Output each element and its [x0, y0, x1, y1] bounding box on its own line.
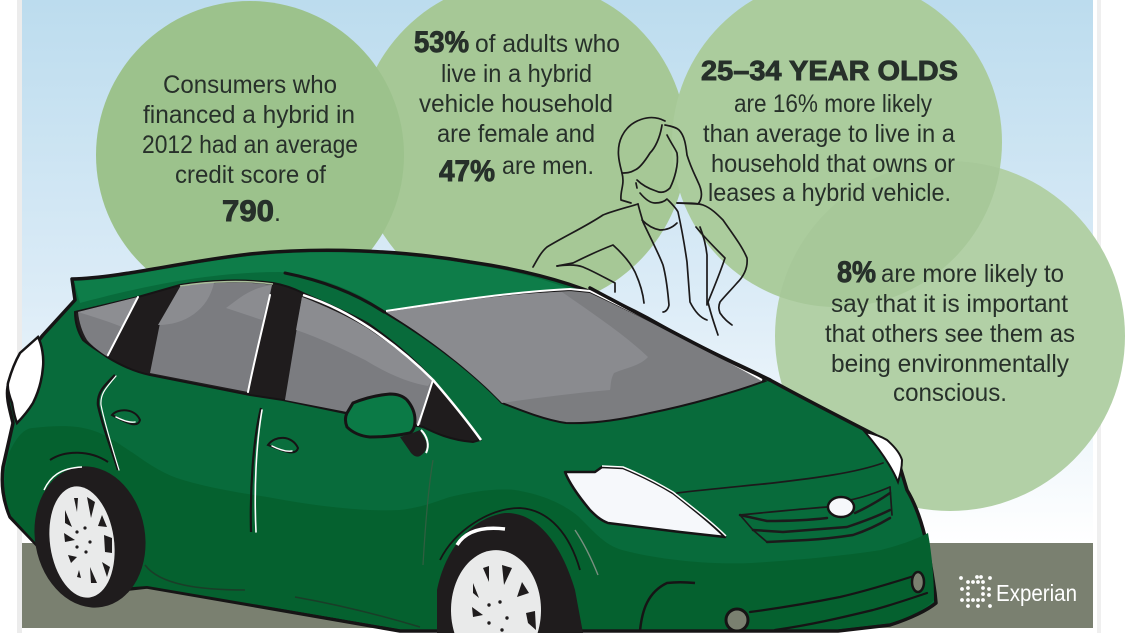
- car roof highlight: [74, 252, 575, 311]
- text: age group stat: household that owns or: [711, 150, 955, 178]
- illustration: woman line drawing: [533, 118, 747, 335]
- front wheel: [437, 508, 583, 633]
- text: gender split stat: [414, 26, 620, 188]
- circle: environmentally conscious: [775, 161, 1125, 511]
- circle: 53% female: [357, 0, 687, 310]
- text: gender split stat: vehicle household: [419, 90, 613, 118]
- window trim: [303, 295, 481, 440]
- main headlight: [565, 467, 725, 537]
- text: age group stat: leases a hybrid vehicle.: [708, 179, 951, 207]
- logo: Experian: [959, 575, 1077, 608]
- text: age group stat: 25–34 YEAR OLDS: [701, 55, 958, 86]
- text: credit score stat: 2012 had an average: [142, 131, 358, 159]
- middle window: [150, 283, 272, 392]
- hood edge: [590, 288, 770, 380]
- text: gender split stat: are men.: [502, 152, 594, 180]
- logo wordmark: Experian: [996, 580, 1077, 606]
- circle: 25-34 year olds: [672, 0, 1002, 307]
- text: gender split stat: live in a hybrid: [441, 60, 592, 88]
- rear quarter window: [78, 297, 138, 357]
- background: ground: [22, 543, 1093, 628]
- text: environmental stat: [825, 256, 1075, 407]
- text: credit score stat: 790: [222, 195, 274, 228]
- text: credit score stat: [142, 71, 358, 228]
- bumper and fog lights: [575, 530, 927, 631]
- text: environmental stat: say that it is important: [831, 290, 1068, 318]
- text: gender split stat: 47%: [439, 155, 495, 188]
- windshield: [384, 290, 765, 423]
- toyota-style emblem: [828, 497, 854, 517]
- text: environmental stat: that others see them as: [825, 320, 1075, 348]
- text: environmental stat: 8%: [837, 256, 876, 289]
- door handles and seams: [112, 410, 140, 424]
- rocker trim: [145, 565, 420, 627]
- text: gender split stat: 53%: [414, 26, 469, 59]
- text: credit score stat: Consumers who: [163, 71, 337, 99]
- text: age group stat: are 16% more likely: [734, 90, 932, 118]
- hood line: [677, 463, 883, 493]
- illustration: green hybrid car: [2, 250, 936, 633]
- text: credit score stat: financed a hybrid in: [143, 101, 355, 129]
- logo dots: [959, 575, 992, 608]
- text: age group stat: [701, 55, 958, 207]
- side windows frame: [75, 281, 480, 442]
- rear light: [8, 337, 43, 423]
- side headlight: [865, 432, 902, 482]
- text: credit score stat: credit score of: [175, 161, 326, 189]
- text: gender split stat: of adults who: [475, 30, 620, 58]
- side mirror: [346, 394, 415, 437]
- text: environmental stat: are more likely to: [881, 260, 1064, 288]
- text: credit score stat: .: [274, 199, 281, 227]
- text: environmental stat: being environmentally: [831, 350, 1069, 378]
- grille: [740, 487, 892, 542]
- front door window: [285, 297, 432, 425]
- circle: credit score: [96, 1, 404, 309]
- car lower body shade: [5, 426, 934, 629]
- rear wheel: [24, 453, 156, 616]
- text: gender split stat: are female and: [437, 120, 595, 148]
- text: environmental stat: conscious.: [893, 379, 1007, 407]
- text: age group stat: than average to live in a: [703, 120, 955, 148]
- car body: [2, 250, 936, 631]
